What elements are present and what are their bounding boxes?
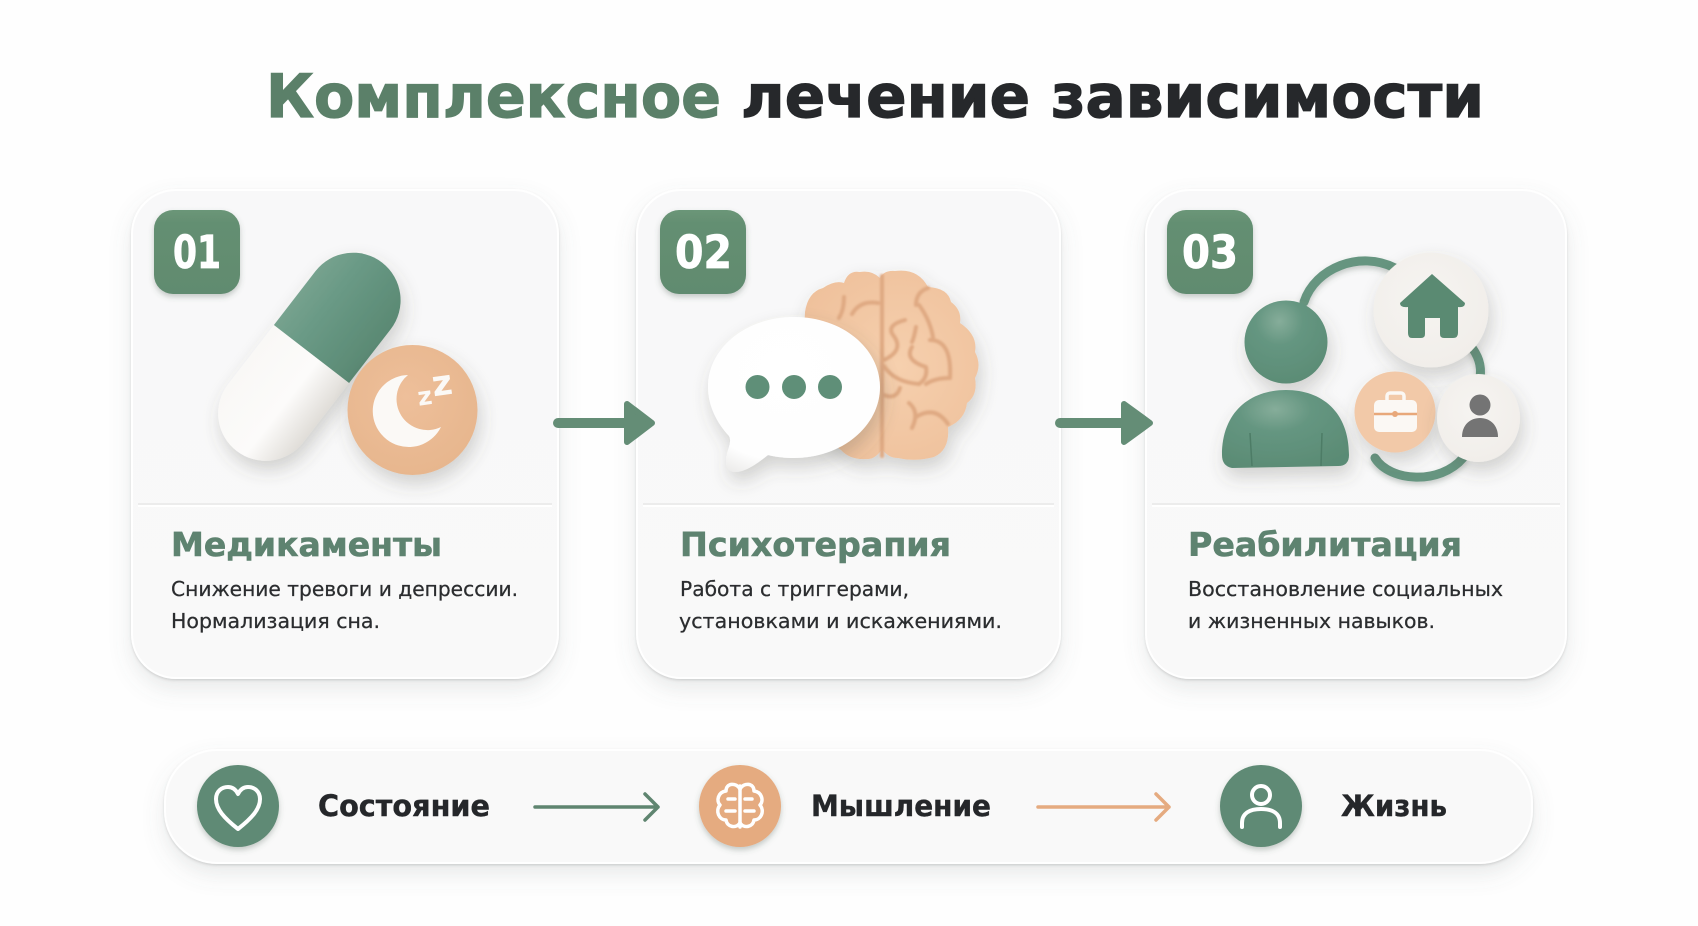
arrow: card 2 to card 3 [1060, 404, 1150, 442]
description: Медикаменты: Нормализация сна. [171, 609, 380, 633]
description: Реабилитация: и жизненных навыков. [1188, 609, 1435, 633]
panel: summary strip [165, 750, 1532, 863]
arrow: green [535, 794, 658, 820]
label: Мышление: Мышление [811, 789, 991, 823]
icon: small person [1437, 374, 1520, 462]
icon: briefcase [1354, 372, 1436, 452]
panel: Реабилитация [1146, 190, 1566, 678]
dots [746, 375, 842, 399]
icon: brain outline [699, 765, 781, 847]
icon: speech bubble [708, 317, 880, 472]
icon: capsule [199, 234, 420, 480]
arrow: orange [1038, 794, 1169, 820]
heading: Реабилитация: Реабилитация [1188, 525, 1462, 564]
number badge 03 [1167, 210, 1253, 294]
number badge 01: 01 [173, 226, 221, 279]
heading: Медикаменты: Медикаменты [171, 525, 442, 564]
icon: heart [197, 765, 279, 847]
label: Жизнь: Жизнь [1341, 789, 1447, 823]
description: Реабилитация: Восстановление социальных [1188, 577, 1503, 601]
number badge 02: 02 [675, 226, 732, 279]
number badge 01 [154, 210, 240, 294]
label: Состояние: Состояние [318, 789, 490, 823]
title: Комплексное [266, 62, 721, 132]
icon: person outline [1220, 765, 1302, 847]
description: Психотерапия: Работа с триггерами, [680, 577, 909, 601]
title: лечение зависимости [741, 62, 1484, 132]
panel: Медикаменты [132, 190, 558, 678]
number badge 03: 03 [1182, 226, 1238, 279]
description: Психотерапия [679, 577, 1002, 633]
description: Медикаменты [171, 577, 518, 633]
panel: Психотерапия [637, 190, 1060, 678]
arrow: card 1 to card 2 [558, 404, 652, 442]
icon: moon tablet: z [429, 363, 455, 405]
icon: connecting ring [1304, 261, 1481, 477]
icon: person [1222, 300, 1349, 468]
icon: moon tablet: z [416, 381, 434, 412]
icon: home [1374, 252, 1488, 368]
description: Медикаменты: Снижение тревоги и депрессии. [171, 577, 518, 601]
icon: moon tablet [348, 345, 478, 475]
description: Реабилитация [1188, 577, 1503, 633]
description: Психотерапия: установками и искажениями. [679, 609, 1002, 633]
number badge 02 [660, 210, 746, 294]
icon: brain [800, 271, 978, 460]
title [266, 62, 1484, 132]
heading: Психотерапия: Психотерапия [680, 525, 951, 564]
